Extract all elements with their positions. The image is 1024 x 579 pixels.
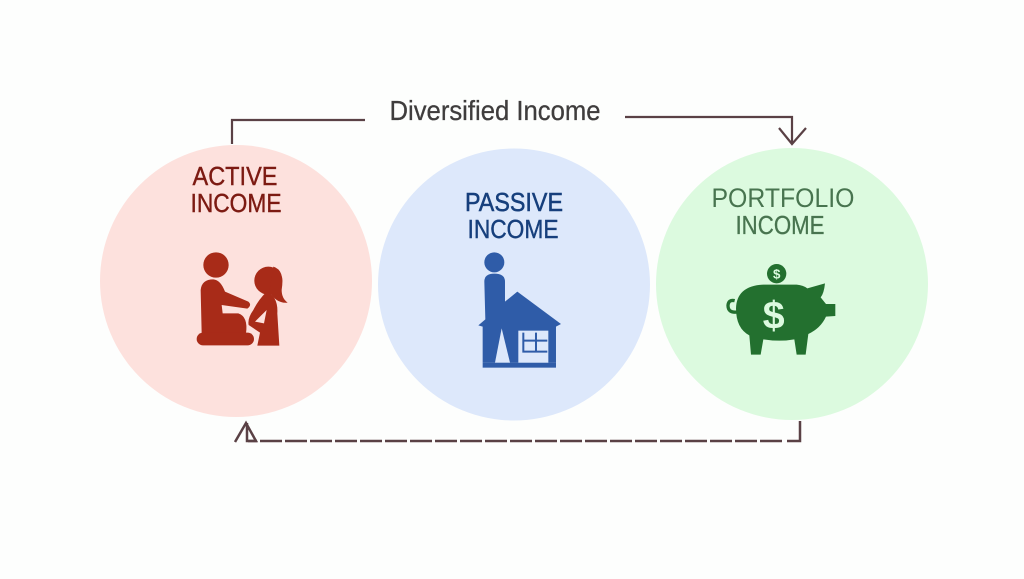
- icon: piggy bank: $: [763, 294, 785, 338]
- active income heading: ACTIVE: [192, 161, 278, 191]
- panel: portfolio income: [656, 148, 928, 420]
- portfolio income heading: PORTFOLIO: [712, 183, 854, 213]
- arrow: active to title connector: [232, 120, 365, 144]
- icon: person and house: [478, 252, 561, 368]
- portfolio income heading line 2: INCOME: [736, 210, 824, 240]
- panel: active income: [100, 145, 372, 417]
- passive income heading: PASSIVE: [465, 187, 563, 217]
- arrow: title to portfolio: [625, 117, 806, 144]
- icon: piggy bank: $: [773, 266, 781, 281]
- title: Diversified Income: [390, 95, 600, 126]
- arrow: dashed return to active: [235, 421, 800, 442]
- active income heading line 2: INCOME: [190, 188, 282, 218]
- panel: passive income: [378, 148, 650, 420]
- icon: adult and child: [197, 252, 288, 346]
- passive income circle: [378, 148, 650, 420]
- active income circle: [100, 145, 372, 417]
- portfolio income circle: [656, 148, 928, 420]
- passive income heading line 2: INCOME: [468, 214, 558, 244]
- icon: piggy bank: [728, 264, 835, 355]
